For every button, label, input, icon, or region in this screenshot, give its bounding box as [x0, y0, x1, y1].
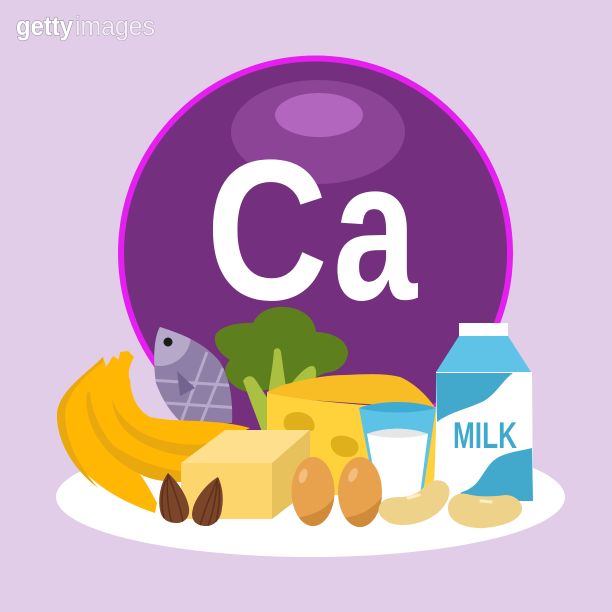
icon: glass of milk [359, 402, 436, 495]
heading: Ca [206, 119, 418, 342]
watermark logo: images [75, 11, 155, 41]
carton roof [436, 336, 531, 372]
carton label: MILK [453, 415, 517, 456]
heading: Ca: C [206, 119, 328, 342]
calcium sphere [121, 58, 510, 448]
carton body [434, 372, 533, 501]
plate [56, 437, 565, 557]
carton lower wave [460, 448, 533, 501]
infographic canvas [16, 15, 565, 557]
icon: egg right [338, 457, 382, 527]
watermark logo: getty [16, 11, 73, 41]
icon: egg left [292, 457, 334, 526]
carton upper wave [436, 373, 513, 422]
watermark logo [16, 11, 155, 41]
carton cap [459, 323, 508, 336]
icon: broccoli [215, 307, 348, 432]
icon: bean right [448, 494, 522, 528]
icon: milk carton [434, 323, 533, 501]
icon: fish [154, 327, 232, 423]
heading: Ca: a [333, 119, 418, 342]
icon: almonds [159, 473, 223, 526]
icon: bananas [57, 351, 250, 513]
icon: butter [181, 430, 310, 519]
icon: bean left [379, 480, 450, 525]
icon: cheese [267, 374, 438, 495]
